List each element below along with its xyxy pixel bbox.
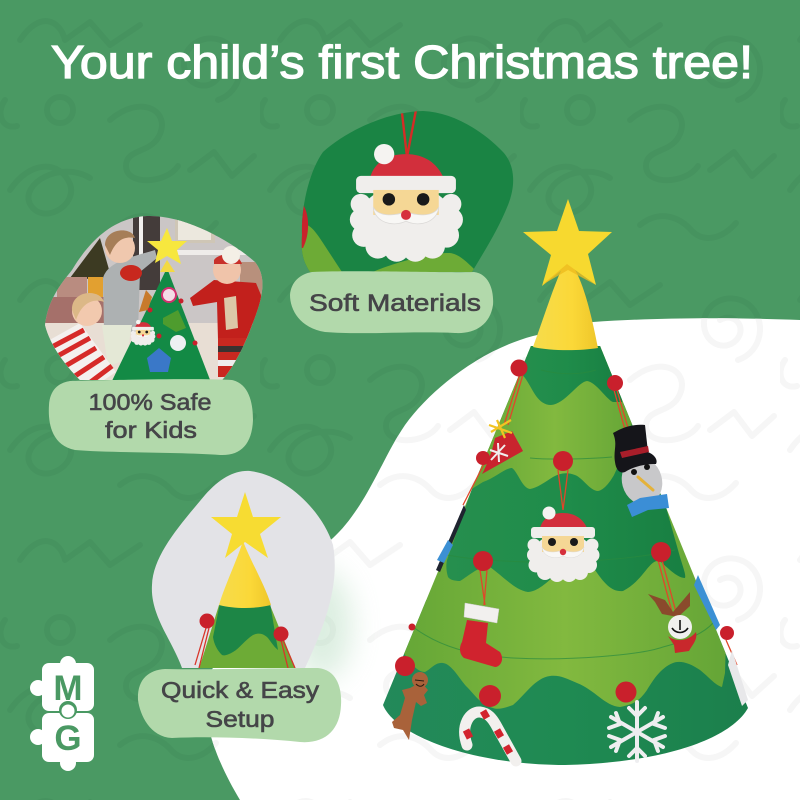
ornament: candy cane xyxy=(465,711,516,761)
logo: MG puzzle: M xyxy=(53,669,83,708)
panel: safe for kids photo xyxy=(45,216,262,380)
ribbons xyxy=(463,371,737,665)
panel: quick setup mini tree xyxy=(152,470,335,668)
title: Your child’s first Christmas tree! xyxy=(51,36,753,88)
santa ornament xyxy=(350,144,463,262)
tier: bottom dark green xyxy=(375,600,755,770)
star xyxy=(211,492,281,558)
ribbon xyxy=(402,110,416,157)
child in stripes xyxy=(46,293,116,384)
label pill: Quick & Easy Setup: Quick & Easy xyxy=(161,677,320,703)
label pill: Quick & Easy Setup xyxy=(138,668,341,742)
child in grey sweater xyxy=(102,230,157,366)
label pill: Soft Materials xyxy=(290,271,493,333)
ornament: snowflake xyxy=(609,702,665,761)
tier: third dark green xyxy=(446,340,685,592)
child in red xyxy=(190,246,263,377)
red ornament edge xyxy=(302,206,308,248)
christmas tree in background xyxy=(70,238,112,280)
tier: fourth light green xyxy=(395,340,735,709)
ornament: snowman xyxy=(613,425,669,517)
ornament: side edge pieces xyxy=(436,505,748,706)
yellow cone xyxy=(219,541,271,608)
ornament: santa xyxy=(527,506,600,582)
label pill: 100% Safe for Kids xyxy=(49,379,253,455)
dark green tier xyxy=(213,603,278,655)
ornament: reindeer xyxy=(648,592,696,653)
felt cone tiers xyxy=(375,340,755,770)
light green lower cone xyxy=(198,605,297,672)
ornament: gingerbread xyxy=(392,672,428,740)
logo: MG puzzle xyxy=(30,656,94,771)
main felt christmas tree xyxy=(375,199,755,770)
tier: second light green xyxy=(470,340,640,491)
felt tree in photo xyxy=(110,228,212,385)
panel: soft materials close-up xyxy=(302,111,514,272)
label pill: Soft Materials: Soft Materials xyxy=(309,290,481,317)
pompoms and ribbons xyxy=(195,628,295,668)
pompoms xyxy=(395,360,734,707)
room background xyxy=(40,215,270,385)
ornament: bell xyxy=(482,420,523,474)
yellow cone top xyxy=(533,262,598,350)
tier: top dark green xyxy=(523,346,622,405)
label pill: 100% Safe for Kids: 100% Safe xyxy=(88,389,212,415)
stitching xyxy=(413,370,713,659)
star xyxy=(523,199,612,286)
label pill: Quick & Easy Setup: Setup xyxy=(206,706,274,732)
label pill: 100% Safe for Kids: for Kids xyxy=(105,417,197,443)
logo: MG puzzle: G xyxy=(54,719,82,758)
soft green glow beside setup panel xyxy=(292,570,352,680)
ornament: stocking xyxy=(460,603,502,667)
light green felt tier xyxy=(300,222,475,275)
background: white wave region xyxy=(205,318,800,800)
